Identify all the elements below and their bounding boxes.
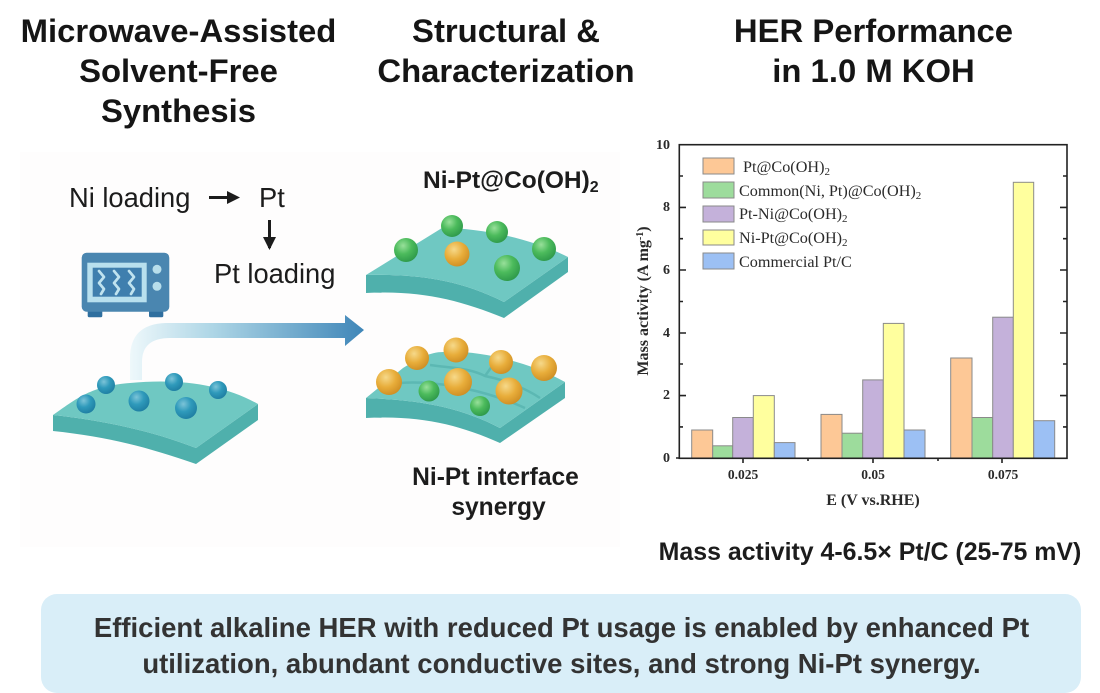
legend: Pt@Co(OH)	[743, 158, 824, 176]
y tick labels: 2	[663, 388, 670, 403]
legend: Commercial Pt/C	[739, 253, 852, 271]
bar chart: mass activity	[635, 138, 1067, 509]
icon: microwave	[82, 253, 169, 317]
legend: 2	[916, 190, 921, 202]
arrow: Pt down	[263, 220, 276, 250]
text: Pt: Pt	[259, 182, 285, 213]
legend: Pt-Ni@Co(OH)	[739, 205, 842, 223]
slab: interface-rich particles	[366, 338, 565, 443]
legend: Common(Ni, Pt)@Co(OH)	[739, 182, 916, 200]
heading: synthesis: Microwave-Assisted	[21, 12, 336, 49]
x tick labels: 0.075	[988, 467, 1018, 482]
heading: characterization: Characterization	[377, 52, 635, 89]
y tick labels	[656, 138, 670, 466]
heading: performance	[734, 12, 1013, 89]
axes frame	[676, 145, 1067, 463]
heading: synthesis: Solvent-Free	[79, 52, 278, 89]
label: interface synergy: synergy	[451, 494, 546, 521]
label: interface synergy: Ni-Pt interface	[412, 464, 579, 491]
heading: characterization: Structural &	[412, 12, 600, 49]
y axis title: Mass activity (A mg	[635, 240, 652, 376]
heading: synthesis: Synthesis	[101, 92, 256, 129]
text: Pt loading: Pt loading	[214, 258, 335, 289]
y tick labels: 0	[663, 451, 670, 466]
legend: Ni-Pt@Co(OH)	[739, 229, 842, 247]
y axis title: )	[635, 226, 652, 232]
heading: performance: in 1.0 M KOH	[772, 52, 975, 89]
label: interface synergy	[412, 464, 579, 521]
x tick labels: 0.025	[728, 467, 758, 482]
y tick labels: 8	[663, 200, 670, 215]
conclusion box: Efficient alkaline HER with reduced Pt usage is enabled by enhanced Pt	[94, 612, 1029, 643]
bars: 0.075 V	[951, 182, 1055, 458]
heading: characterization	[377, 12, 635, 89]
label: Ni-Pt@Co(OH)2: 2	[590, 179, 599, 196]
legend	[703, 158, 921, 271]
bars: 0.05 V	[821, 323, 925, 458]
conclusion box	[41, 594, 1081, 693]
slab: precursor support with blue particles	[53, 373, 258, 464]
heading: synthesis	[21, 12, 336, 129]
y tick labels: 4	[663, 326, 670, 341]
arrow: Ni to Pt	[209, 191, 240, 204]
text: Ni loading: Ni loading	[69, 182, 190, 213]
legend: 2	[842, 213, 848, 225]
y axis title: -1	[635, 232, 646, 240]
y tick labels: 6	[663, 263, 670, 278]
legend: 2	[824, 166, 830, 178]
background tint	[20, 152, 620, 547]
label: Ni-Pt@Co(OH)2: Ni-Pt@Co(OH)	[423, 167, 590, 194]
conclusion box: utilization, abundant conductive sites, and strong Ni-Pt synergy.	[142, 648, 981, 679]
x tick labels	[728, 467, 1018, 482]
x axis title: E (V vs.RHE)	[826, 492, 920, 509]
heading: performance: HER Performance	[734, 12, 1013, 49]
y tick labels: 10	[656, 138, 670, 153]
arrow: process flow	[130, 315, 364, 380]
bars: 0.025 V	[692, 396, 795, 458]
slab: green and gold particles	[366, 215, 568, 318]
x tick labels: 0.05	[861, 467, 885, 482]
legend: 2	[842, 237, 848, 249]
chart caption: Mass activity 4-6.5× Pt/C (25-75 mV)	[659, 538, 1081, 566]
